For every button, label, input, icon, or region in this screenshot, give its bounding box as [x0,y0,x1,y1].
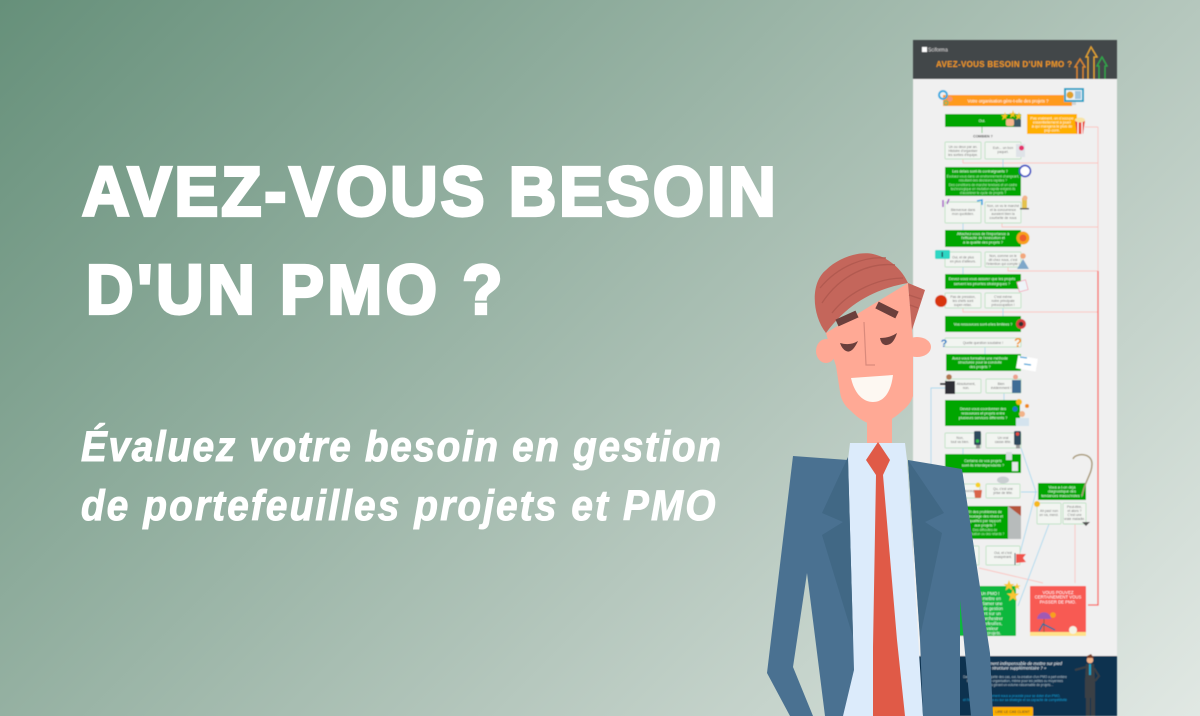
footer: Découvrez comment nous a procédé pour se doter d'un PMO, [970,694,1060,698]
shirt [840,443,923,716]
result: green pmo box: la valeur [982,626,999,631]
button: LIRE LE CAS CLIENT [995,710,1031,714]
icon: question hook [1073,455,1092,496]
nose [864,322,875,365]
banner: question 1 [943,95,1072,106]
footer: Dans l'immense majorité des cas, oui, la création d'un PMO a part entière [963,675,1067,679]
answers row 2: mon quotidien. [952,212,974,216]
footer: une structure supplémentaire ? » [984,666,1047,670]
side box: magnétique [1038,483,1086,500]
title: AVEZ-VOUS BESOIN [82,154,776,231]
subtitle: Évaluez votre besoin en gestion [81,422,721,470]
box: méthode [946,354,1038,372]
result: red passer box: PASSER DE PMO. [1040,599,1076,604]
answers row 3: Oui, et de plus [952,256,974,260]
answers row 5: non. [963,386,969,390]
box: délais: résultant des décisions rapides ? [959,178,1007,182]
footer: « Est-il vraiment indispensable de mettre sur pied [968,661,1063,666]
result: green pmo box: de de gestion [977,606,1004,611]
box: pas vraiment: pop-corn. [1044,128,1060,132]
title: D'UN PMO ? [86,252,502,329]
footer [913,654,1117,716]
box: délais [945,167,1021,196]
answers row 2 [943,196,1029,223]
answers row 8 with flag: exaspérant. [994,555,1012,559]
box: coordonner: Devez-vous coordonner des [960,407,1006,411]
answers row 5: Absolument, [957,382,975,386]
answers row 6 with traffic lights: Un vrai [998,436,1009,440]
box: méthode: Avez-vous formalisé une méthode [952,356,1008,360]
answers row 6 with traffic lights [945,431,1021,448]
box: problèmes: décalage des rêves et [967,514,1003,518]
subtitle [81,422,721,529]
answers row 4 [935,293,1021,308]
answers row 1: Un ou deux par an. [949,145,977,149]
box: pas vraiment: Pas vraiment, on s'occupe [1030,116,1074,120]
eyes [840,333,897,352]
box: pas vraiment: essentiellement à jouer [1033,120,1072,124]
footer: bénéfique à toute organisation, même pour les petites ou moyennes [967,679,1063,683]
box: coordonner [945,399,1029,426]
box: problèmes: Des difficultés de [973,528,997,532]
answers row 6 with traffic lights: tout va bien. [951,440,969,444]
answers row 6 with traffic lights: Non, [956,436,964,440]
answers row 4: les chefs sont [953,299,973,303]
icon: medal [1016,232,1030,244]
box: méthode: des projets ? [969,365,991,369]
box: pas vraiment [1027,114,1077,134]
result: green pmo box: réclamer une [977,601,1003,606]
answers row 3: l'intention qui compte ! [986,262,1020,266]
answers row 1 [945,142,1025,159]
box: délais: Évoluez-vous dans un environnement changeant, [947,174,1019,178]
answers row 3: dit chez nous, c'est [989,258,1017,262]
label: combien: COMBIEN ? [973,134,993,138]
jacket [767,456,993,716]
answers row 4: C'est même [994,295,1012,299]
side box: magnétique: diagnostiqué des [1048,490,1076,494]
box: question soudaine: ? [941,338,948,350]
icon: monitor [1064,88,1084,105]
box: problèmes: Et des problèmes de [968,510,1002,514]
result: green pmo box: Un PMO ! [981,591,999,596]
box: dépendances: Certains de vos projets [964,459,1002,463]
side answers: vraie maladie. [1064,517,1085,521]
box: priorités: servent les priorités stratégiques ? [954,282,1010,286]
answers row 7: Qu, c'est une [993,487,1013,491]
result: green pmo box: , à orchestrer [977,616,1003,621]
footer: et l'impact que cela a eu sur sa stratégie et sa capacité de compétitivité [963,698,1067,702]
box: problèmes: aux projets ? [974,524,996,528]
answers row 6 with traffic lights: casse-tête. [995,440,1011,444]
box: problèmes [945,506,1021,539]
answers row 3: Non, comme on le [989,254,1017,258]
icon: stars [1004,580,1020,601]
poster header: AVEZ-VOUS BESOIN D'UN PMO ? [936,60,1072,69]
box: importance: Attachez-vous de l'importance à [957,232,1010,236]
box: importance [945,230,1021,247]
icon: clock [1020,166,1030,176]
result: red passer box [1030,586,1086,636]
answers row 4: Pas de pression, [950,295,976,299]
ears [816,337,931,363]
box: priorités [945,274,1028,292]
box: oui: Oui. [979,119,985,123]
poster background [913,40,1117,716]
footer: entreprises gérant un volume raisonnable de projets... [977,683,1053,687]
box: ressources: Vos ressources sont-elles limitées ? [954,322,1012,326]
connector lines [931,127,1098,606]
answers row 4: préoccupation ! [991,303,1015,307]
box: délais: Les délais sont-ils contraignants ? [952,170,1008,174]
side answers: et alors ? [1068,509,1082,513]
side answers: Ah pas! non [1040,509,1058,513]
answers row 2: Non, on vu le marché [987,204,1019,208]
side box: magnétique: tendances masochistes ? [1041,494,1083,498]
panel: flowchart poster [913,40,1117,716]
button [992,707,1033,716]
answers row 3: en plus d'ailleurs. [950,260,976,264]
result: green pmo box: portefeuilles, [978,621,1002,626]
box: priorités: Devez-vous vous assurer que les projets [949,277,1015,281]
answers row 5: Bien [998,382,1005,386]
icon: growth arrows [1075,47,1107,79]
tie [866,442,905,716]
answers row 8 with flag: Oui, et c'est [994,551,1012,555]
answers row 8 with flag: Non. [958,554,966,558]
box: dépendances [945,452,1021,473]
answers row 4: notre principale [991,299,1015,303]
poster header [913,40,1117,79]
answers row 7: Oui, et beaucoup. [950,489,976,493]
answers row 2: Bienvenue dans [951,208,975,212]
neck [867,415,892,447]
box: problèmes: réalisation ou des retards ? [966,532,1004,536]
answers row 7: prise de tête. [993,491,1013,495]
hair [815,253,925,333]
character: smiling man [767,253,993,716]
result: red passer box: VOUS POUVEZ [1042,590,1074,595]
box: oui [945,114,1021,127]
answers row 7 [945,476,1020,498]
box: délais: technologique en mutation rapide exigent-ils [951,187,1016,191]
side answers: Peut-être, [1067,505,1082,509]
answers row 5: évidemment ! [991,386,1011,390]
icon: popcorn [1075,118,1085,134]
answers row 1: paquet. [997,150,1009,154]
box: délais: d'accélérer le cycle de projets ? [960,191,1006,195]
answers row 4: super-relax. [954,303,972,307]
answers row 2: auraient bien la [991,212,1015,216]
box: importance: l'efficacité de l'exécution et [961,236,1005,240]
title [82,154,776,329]
box: coordonner: ressources et projets entre [961,412,1005,416]
icon: gears [939,91,952,105]
box: importance: à la qualité des projets ? [963,240,1003,244]
box: méthode: structurée pour la conduite [958,360,1002,364]
smile [851,375,893,402]
box: problèmes: qualités par rapport [969,519,1001,523]
side box: magnétique: Vous a-t-on déjà [1049,486,1076,490]
answers row 2: courbette de nous [989,216,1017,220]
subtitle: de portefeuilles projets et PMO [81,481,716,529]
result: red passer box: CERTAINEMENT VOUS [1035,595,1082,600]
side answers: C'est une [1067,513,1082,517]
answers row 1: les sorties d'équipe. [948,153,978,157]
answers row 1: Euh... un bon [993,146,1013,150]
box: pas vraiment: à qui mangera le plus de [1032,124,1072,128]
result: green pmo box: à mettre en [979,596,1001,601]
box: coordonner: plusieurs services différents ? [959,416,1007,420]
side answers: on va, merci. [1039,513,1059,517]
box: question soudaine [941,335,1022,350]
side answers [1034,501,1090,526]
icon: thumb and stars [1001,110,1022,127]
banner: question 1: Votre organisation gère-t-elle des projets ? [968,98,1049,103]
box: question soudaine: ? [1014,335,1022,350]
result: green pmo box: pant sur un [979,611,1001,616]
poster header: Sciforma [928,48,948,54]
answers row 3 [935,250,1029,269]
box: délais: Des conditions de marché tendues et un cadre [949,183,1017,187]
face [826,283,913,423]
box: dépendances: sont-ils interdépendants ? [962,464,1004,468]
box: ressources [945,316,1026,332]
box: question soudaine: Quelle question soudaine ! [963,341,1003,345]
answers row 2: et la concurrence [990,208,1016,212]
result: green pmo box [945,586,1016,636]
result: green pmo box: des projets. [979,630,1001,636]
answers row 8 with flag [945,546,1026,565]
eyebrows [837,305,897,323]
answers row 5 [940,374,1021,394]
answers row 1: Histoire d'organiser [948,149,978,153]
businessman [1075,654,1099,716]
